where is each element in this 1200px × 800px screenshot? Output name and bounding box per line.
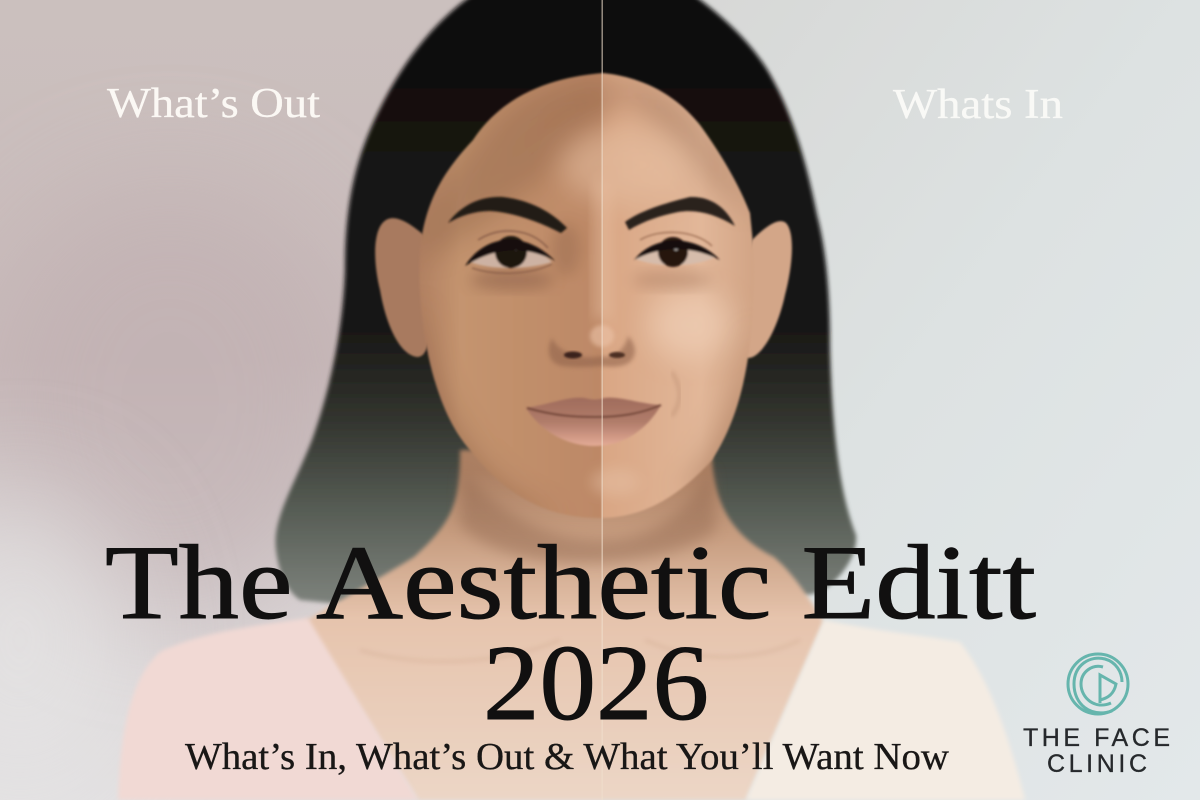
subtitle: What’s In, What’s Out & What You’ll Want Now	[185, 736, 950, 778]
left under-eye shadow	[470, 270, 554, 290]
smile line	[672, 372, 680, 416]
center split line	[602, 0, 603, 800]
chin highlight	[590, 468, 632, 496]
eye socket shade left	[552, 224, 580, 276]
hairline shade	[420, 73, 750, 255]
nose bridge highlight	[594, 180, 612, 320]
collarbone shading	[360, 640, 800, 661]
left ear	[375, 218, 431, 357]
left eye	[465, 231, 555, 273]
portrait illustration	[275, 0, 856, 800]
right eyebrow	[625, 197, 735, 230]
label: whats in: Whats In	[893, 82, 1063, 128]
left eyebrow	[448, 197, 567, 233]
right eye	[634, 232, 720, 267]
forehead highlight	[560, 127, 690, 203]
hair	[275, 0, 856, 620]
label: what's out: What’s Out	[107, 81, 320, 127]
lips	[526, 398, 661, 446]
blouse	[118, 618, 1025, 800]
right ear	[740, 221, 792, 358]
year: 2026	[483, 624, 709, 743]
right under-eye shadow	[632, 271, 712, 289]
logo: the face clinic	[1023, 654, 1170, 778]
logo wordmark: THE FACE	[1023, 724, 1170, 752]
right cheek glow	[648, 291, 732, 359]
neck and chest	[304, 450, 824, 800]
nose	[549, 325, 635, 367]
icon: logo rings	[1068, 654, 1128, 714]
neck shadow	[460, 465, 716, 563]
left jaw shade	[427, 338, 534, 502]
title: The Aesthetic Editt	[105, 524, 1036, 641]
blouse right	[746, 620, 1025, 800]
right jaw shade	[680, 363, 746, 486]
face	[420, 72, 754, 518]
blouse left	[118, 618, 418, 800]
logo wordmark line 2: CLINIC	[1047, 750, 1147, 778]
